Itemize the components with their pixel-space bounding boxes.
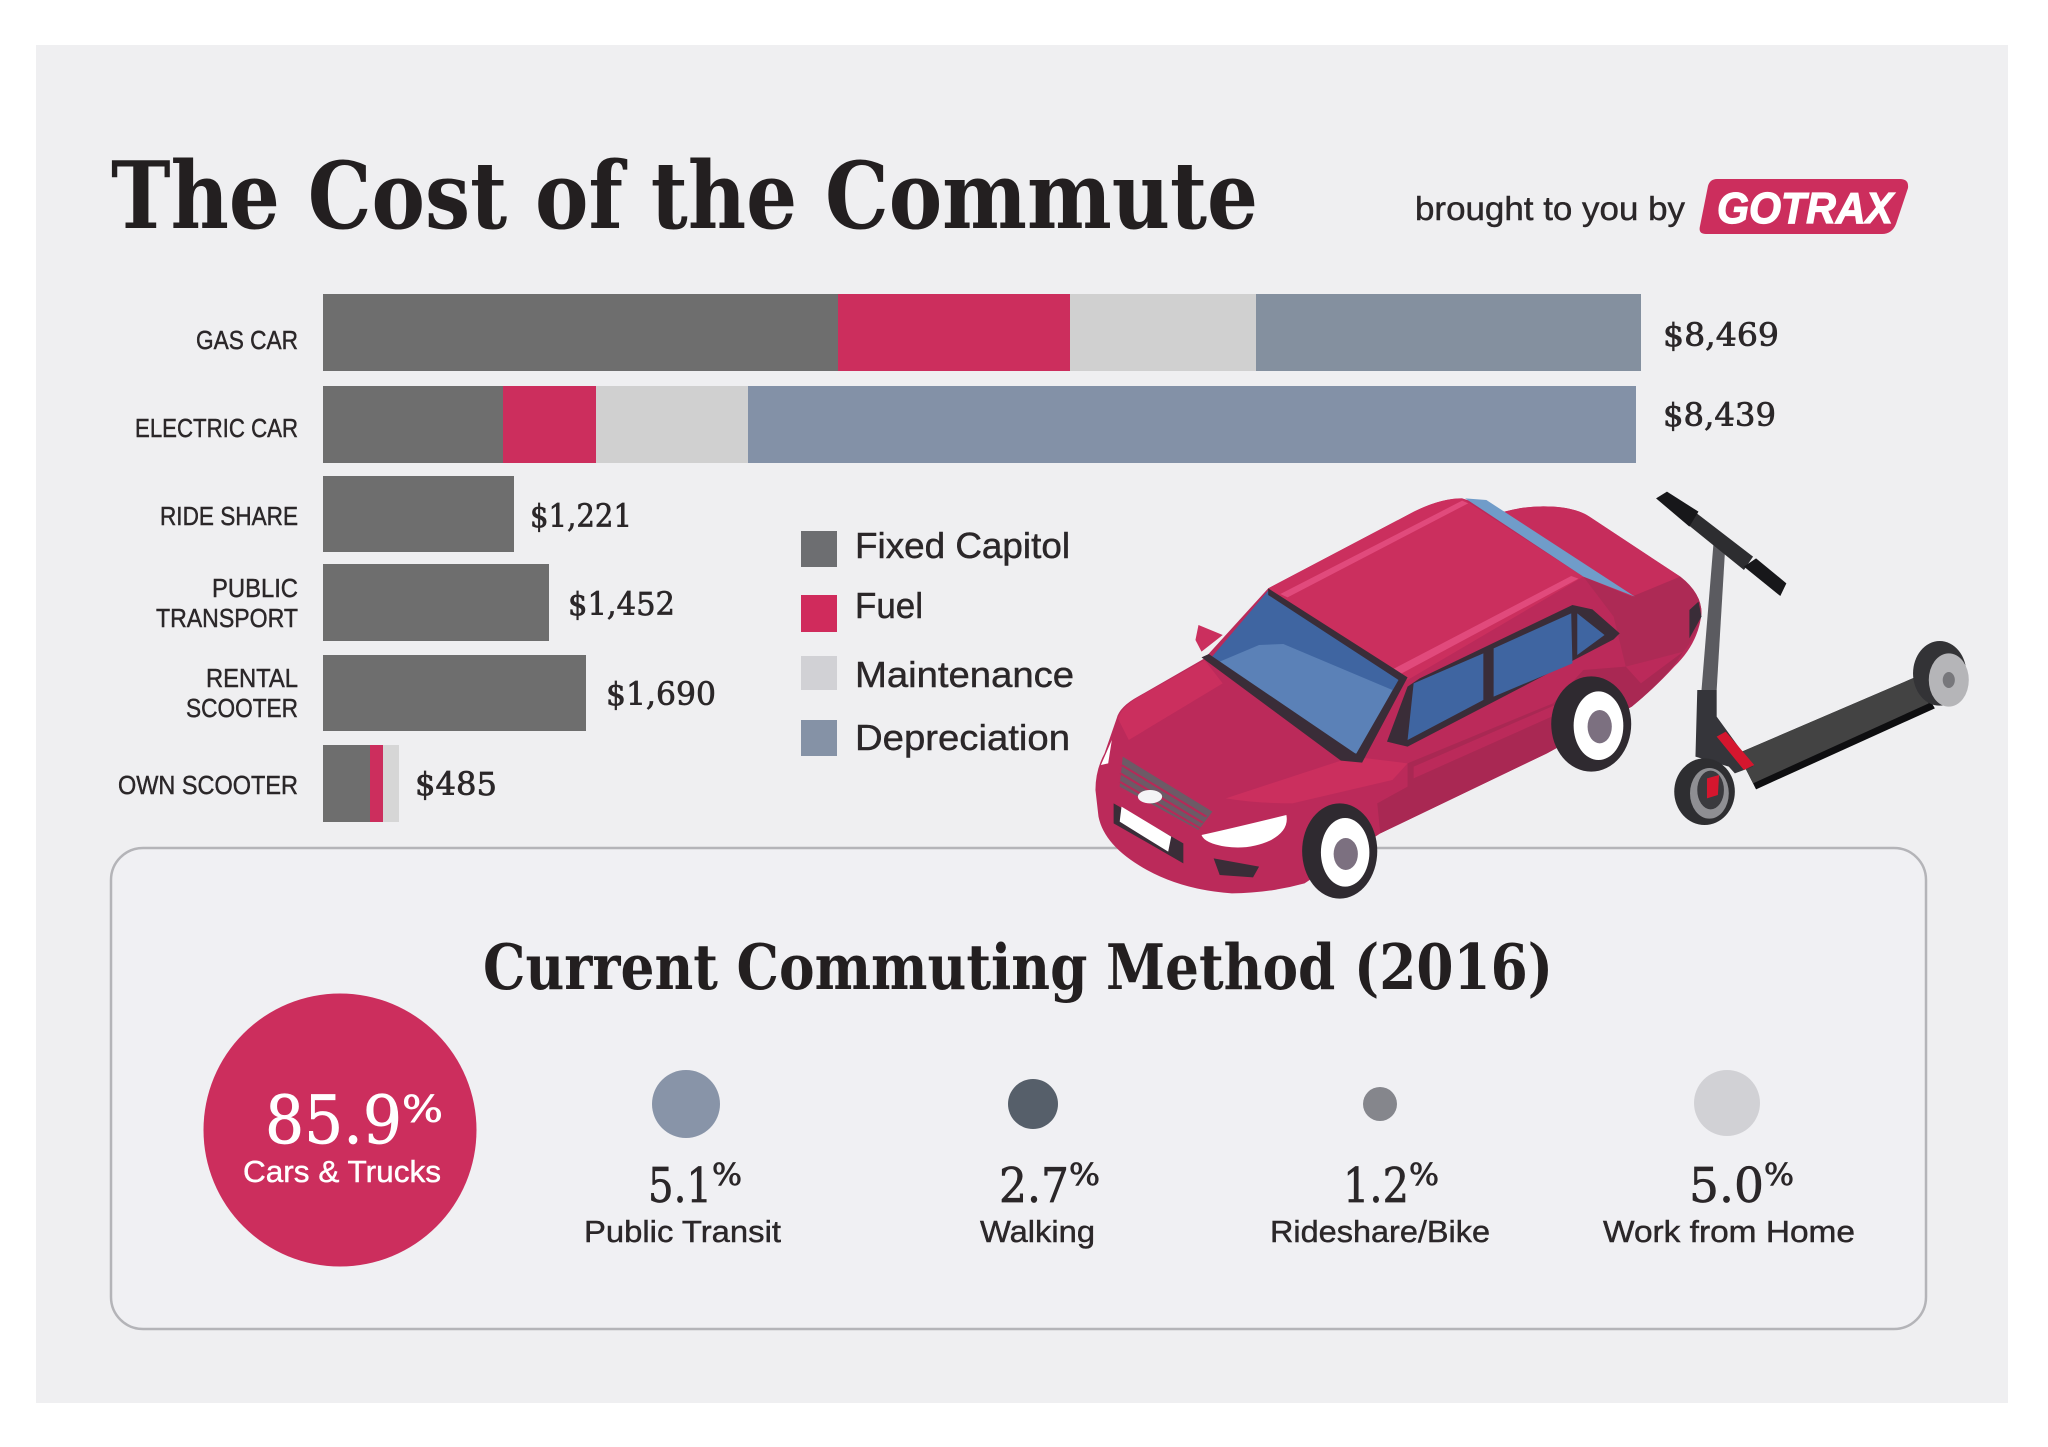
roof highlights xyxy=(1280,501,1468,597)
stat: public transit: 5.1 xyxy=(648,1158,712,1214)
fender glare xyxy=(1101,740,1112,765)
stat: work from home: 5.0 xyxy=(1689,1158,1764,1214)
row: gas car: GAS CAR xyxy=(196,325,298,355)
stat: cars and trucks: Cars & Trucks xyxy=(243,1154,441,1189)
stat: public transit xyxy=(584,1070,781,1249)
row: own scooter xyxy=(118,745,497,822)
legend: fuel xyxy=(801,585,923,632)
legend: fixed capitol: Fixed Capitol xyxy=(855,525,1070,566)
stat: rideshare and bike: 1.2 xyxy=(1343,1158,1409,1214)
legend: maintenance: Maintenance xyxy=(855,654,1074,695)
license plate xyxy=(1114,803,1183,863)
front wheel xyxy=(1674,758,1735,825)
title: The Cost of the Commute xyxy=(111,141,1258,250)
side mirror xyxy=(1195,625,1223,652)
panel: current commuting method xyxy=(111,848,1926,1329)
row: gas car xyxy=(196,294,1779,371)
rear wheel xyxy=(1913,641,1969,707)
row: ride share: $1,221 xyxy=(530,497,632,535)
roof xyxy=(1268,498,1583,680)
stat: walking: % xyxy=(1069,1158,1100,1193)
panel outline xyxy=(111,848,1926,1329)
rear quarter panel xyxy=(1583,577,1702,667)
row: rental scooter xyxy=(186,655,716,731)
handlebar xyxy=(1686,510,1753,570)
row: own scooter: $485 xyxy=(415,765,497,803)
windshield glass xyxy=(1211,591,1405,760)
deck xyxy=(1738,677,1935,789)
fog light xyxy=(1214,858,1259,877)
stat: cars and trucks: % xyxy=(402,1090,443,1131)
legend: fuel: Fuel xyxy=(855,585,923,626)
row: public transport xyxy=(156,564,675,641)
side window frame xyxy=(1387,605,1620,747)
row: gas car: $8,469 xyxy=(1663,316,1779,354)
windshield frame xyxy=(1202,588,1408,763)
stat: cars and trucks xyxy=(204,994,476,1266)
row: electric car: $8,439 xyxy=(1663,396,1776,434)
stat: public transit: Public Transit xyxy=(584,1214,781,1249)
headlight xyxy=(1202,815,1287,847)
red brake strip xyxy=(1717,732,1754,770)
rear light xyxy=(1689,602,1702,638)
stat: rideshare and bike xyxy=(1270,1087,1490,1249)
illustration: red car xyxy=(1095,498,1702,899)
trunk xyxy=(1505,506,1680,597)
row: electric car: ELECTRIC CAR xyxy=(135,413,298,443)
stat: work from home: % xyxy=(1764,1158,1794,1193)
car body xyxy=(1095,498,1702,893)
hood highlights xyxy=(1118,660,1223,740)
row: rental scooter: $1,690 xyxy=(606,675,716,713)
illustration: kick scooter xyxy=(1656,492,1969,825)
row: ride share xyxy=(160,476,632,552)
front wheel xyxy=(1302,803,1377,899)
stat: rideshare and bike: Rideshare/Bike xyxy=(1270,1214,1490,1249)
side sill xyxy=(1377,652,1683,833)
row: rental scooter: SCOOTER xyxy=(186,693,298,723)
fork xyxy=(1695,690,1753,773)
stat: work from home: Work from Home xyxy=(1603,1214,1855,1249)
panel heading: Current Commuting Method (2016) xyxy=(483,930,1553,1004)
rear window xyxy=(1465,498,1635,597)
legend xyxy=(801,525,1074,758)
row: public transport: $1,452 xyxy=(568,585,675,623)
badge xyxy=(1138,790,1162,803)
GOTRAX logo: GOTRAX xyxy=(1717,184,1895,233)
sponsor line xyxy=(1415,179,1908,234)
bar chart: annual commute cost xyxy=(118,294,1779,822)
stat: rideshare and bike: % xyxy=(1409,1158,1439,1193)
stat: walking: 2.7 xyxy=(999,1158,1069,1214)
row: rental scooter: RENTAL xyxy=(206,663,298,693)
rear wheel xyxy=(1551,676,1631,772)
row: public transport: TRANSPORT xyxy=(156,603,298,633)
stem xyxy=(1702,542,1725,690)
row: electric car xyxy=(135,386,1776,463)
stat: walking: Walking xyxy=(980,1214,1095,1249)
row: public transport: PUBLIC xyxy=(212,573,298,603)
stat: work from home xyxy=(1603,1070,1855,1249)
stat: walking xyxy=(980,1079,1100,1249)
stat: public transit: % xyxy=(712,1158,742,1193)
row: own scooter: OWN SCOOTER xyxy=(118,770,298,800)
legend: depreciation: Depreciation xyxy=(855,717,1070,758)
side windows xyxy=(1408,653,1483,740)
row: ride share: RIDE SHARE xyxy=(160,501,298,531)
grille xyxy=(1120,757,1212,830)
stat: cars and trucks: 85.9 xyxy=(265,1082,402,1159)
brought to you by text: brought to you by xyxy=(1415,190,1686,227)
